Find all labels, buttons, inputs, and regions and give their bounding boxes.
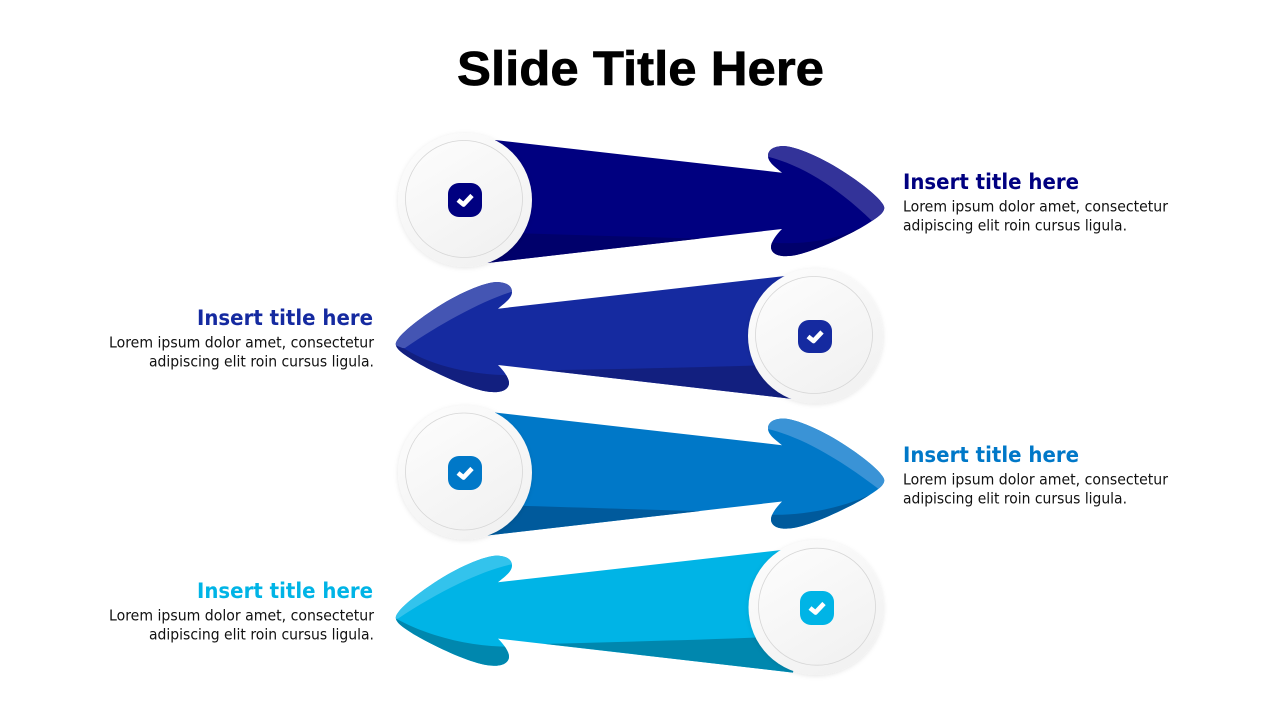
panel: arrow 3 (398, 402, 895, 542)
title: Slide Title Here (457, 43, 824, 96)
text block: item 3: Lorem ipsum dolor amet, consectetur (903, 470, 1169, 488)
arrow 2 body (396, 276, 792, 399)
text block: item 2: Lorem ipsum dolor amet, consectetur (109, 334, 375, 352)
arrow 2 disc (748, 268, 883, 404)
icon: check 3 (448, 456, 482, 490)
text block: item 1 (903, 170, 1169, 234)
panel: arrow 4 (385, 540, 884, 680)
arrow 1 disc (398, 133, 532, 267)
icon: check 1 (448, 183, 482, 217)
arrow 3 disc (398, 406, 532, 540)
text block: item 3: Insert title here (903, 443, 1079, 467)
text block: item 3: adipiscing elit roin cursus ligula. (903, 490, 1127, 508)
arrow 4 disc (748, 540, 884, 675)
arrow 4 body (396, 550, 794, 673)
text block: item 2: adipiscing elit roin cursus ligula. (149, 352, 374, 370)
text block: item 4: adipiscing elit roin cursus ligula. (149, 626, 374, 644)
text block: item 3 (903, 443, 1169, 508)
text block: item 1: Lorem ipsum dolor amet, consectetur (903, 198, 1169, 216)
arrow 1 body (488, 140, 884, 263)
panel: arrow 2 (385, 266, 883, 406)
text block: item 4: Insert title here (197, 579, 373, 603)
text block: item 2 (109, 306, 375, 370)
text block: item 4 (109, 579, 375, 644)
text block: item 4: Lorem ipsum dolor amet, consectetur (109, 606, 375, 624)
icon: check 4 (800, 591, 834, 625)
text block: item 2: Insert title here (197, 306, 373, 330)
icon: check 2 (798, 320, 832, 353)
text block: item 1: Insert title here (903, 170, 1079, 194)
arrow 3 body (488, 412, 884, 536)
text block: item 1: adipiscing elit roin cursus ligula. (903, 216, 1127, 234)
panel: arrow 1 (398, 130, 895, 270)
